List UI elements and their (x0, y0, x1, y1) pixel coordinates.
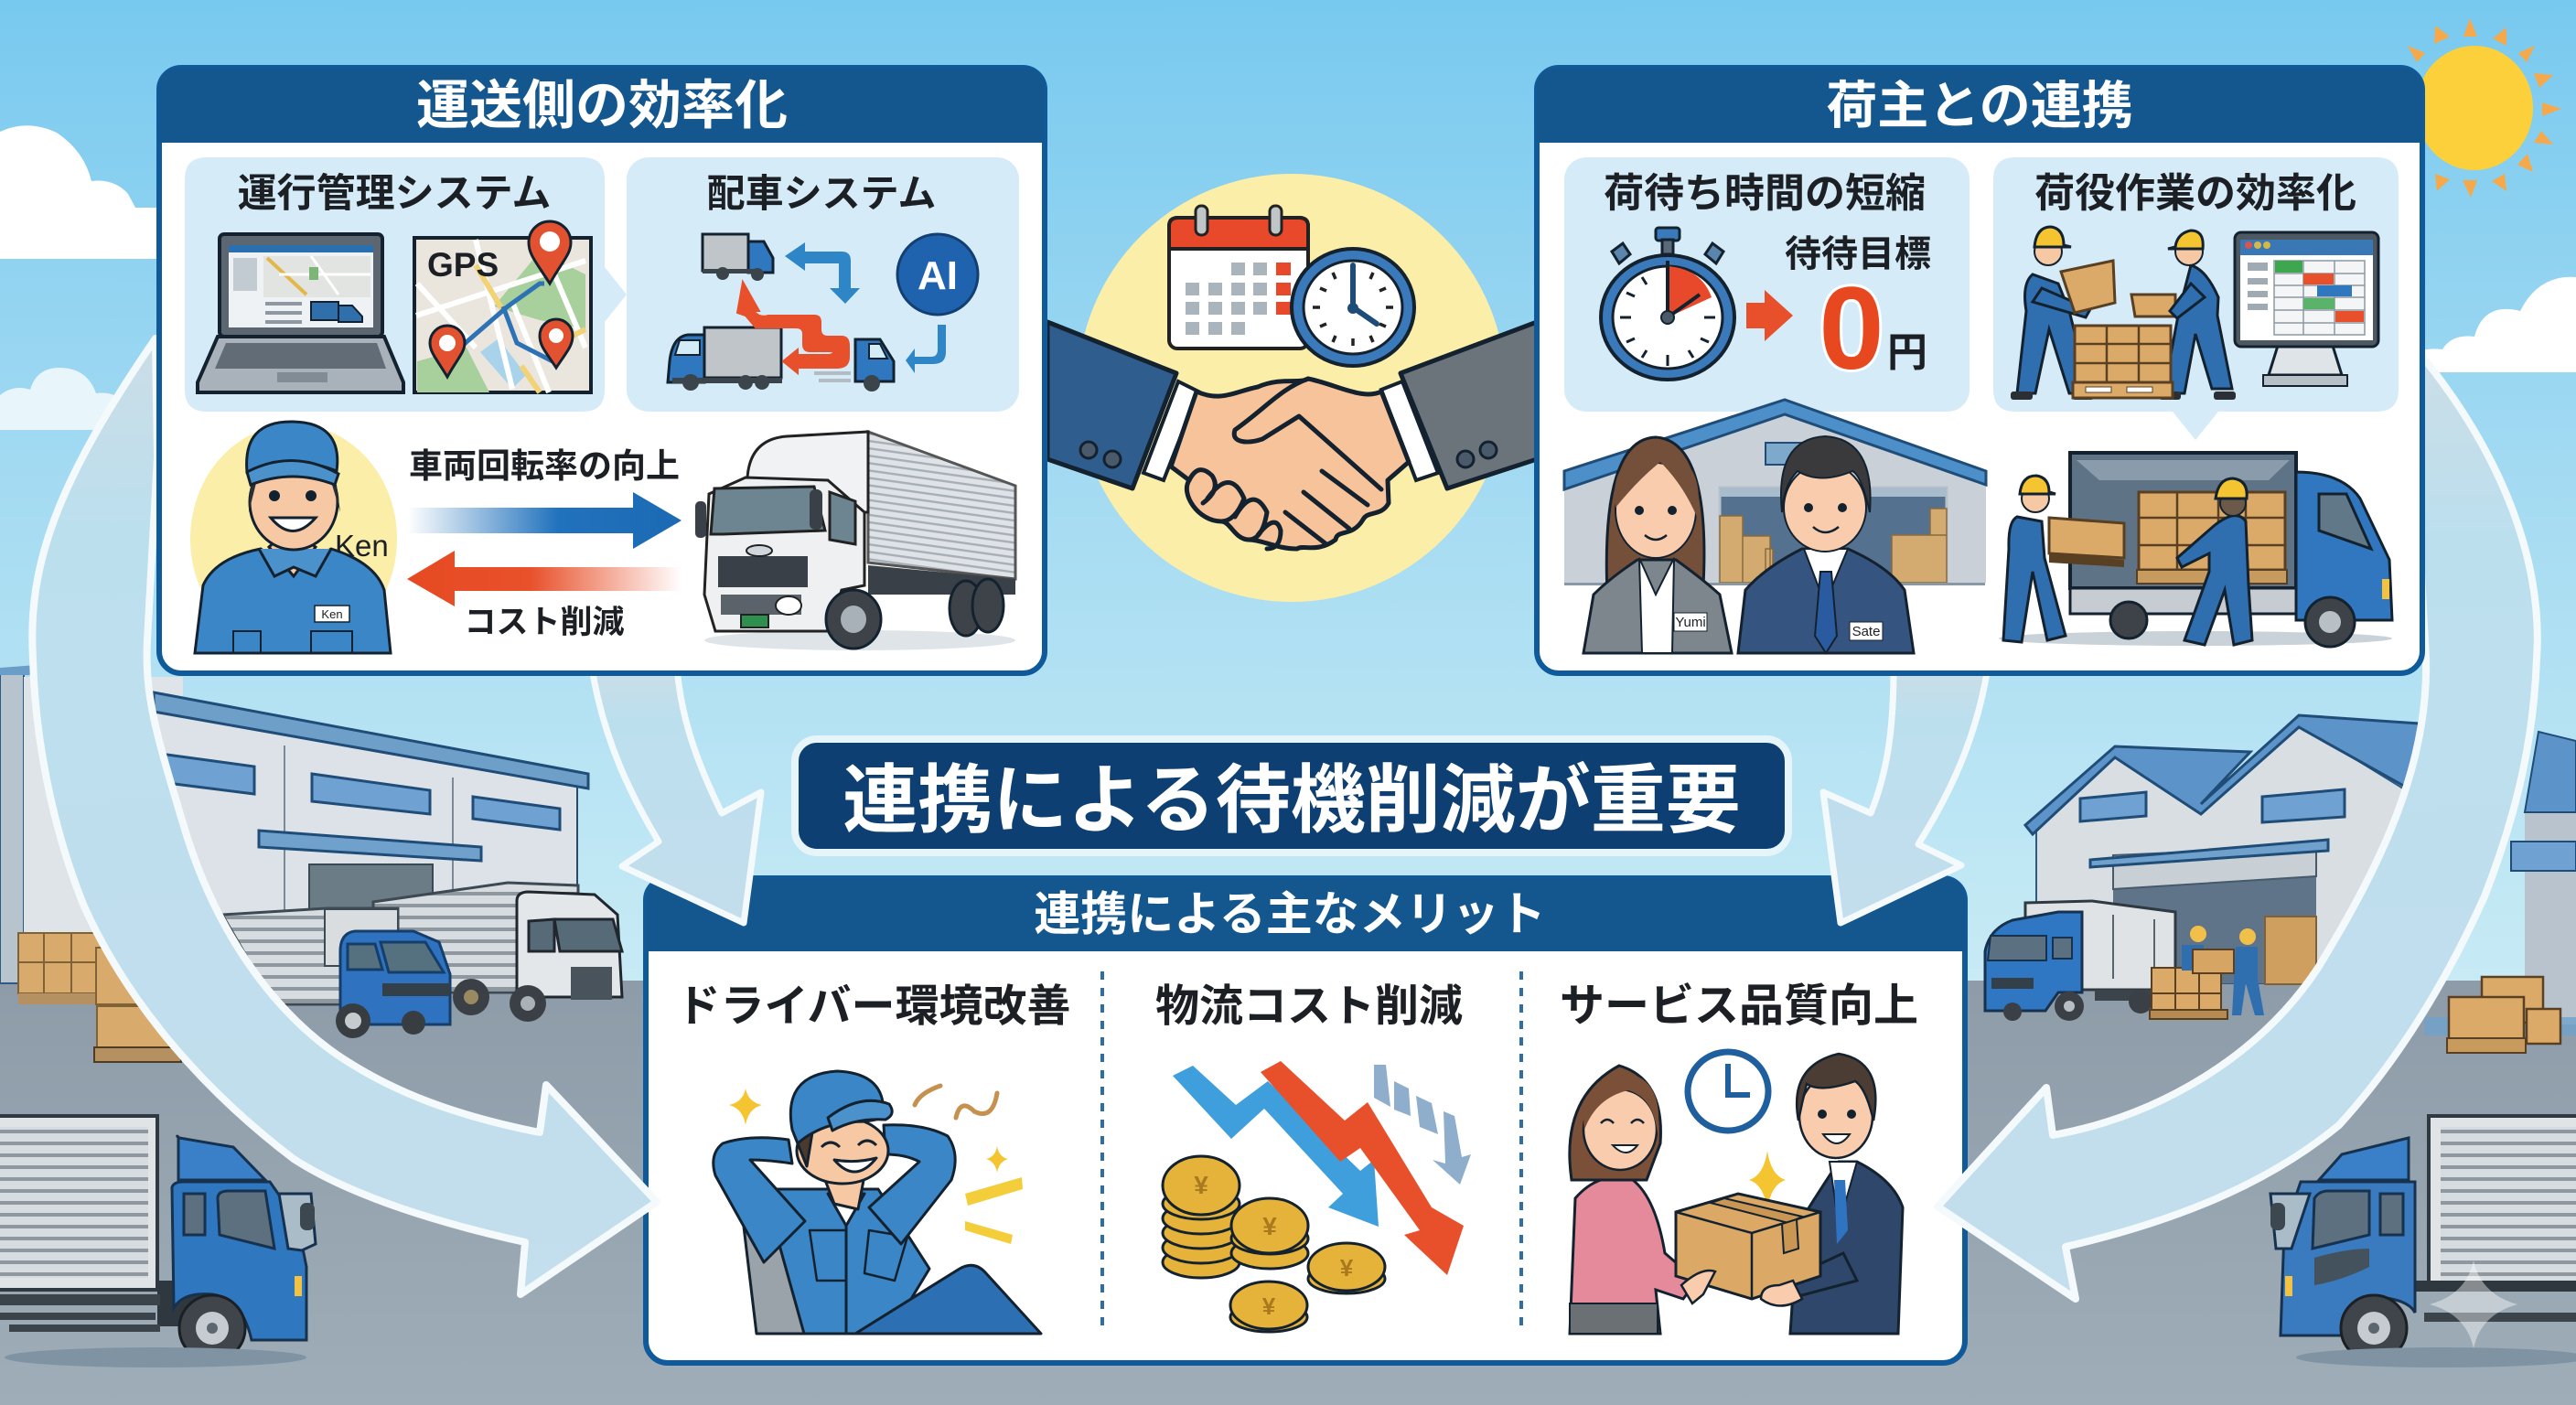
icon: small truck lower right (814, 339, 894, 391)
arrow: red (1746, 290, 1793, 341)
subheading: 荷待ち時間の短縮 (1604, 171, 1926, 216)
character: Sate (1738, 436, 1914, 653)
arrow: blue to truck (407, 492, 682, 549)
truck: large blue bottom left (0, 1116, 316, 1361)
illustration: large truck (695, 432, 1015, 650)
name tag (1850, 622, 1883, 640)
background: workers and pallet at right warehouse (2150, 926, 2264, 1019)
icon: clock (1292, 249, 1414, 366)
icon: calendar (1169, 206, 1308, 349)
arrow: red to driver (407, 551, 682, 606)
arrow: large curved right (1937, 348, 2538, 1299)
panel: 連携による主なメリット (646, 878, 1965, 1363)
illustration: handshake with calendar and clock (1047, 174, 1537, 602)
ground (0, 981, 2576, 1405)
icon: pallet of boxes (2073, 326, 2173, 398)
heading: 荷主との連携 (1826, 77, 2133, 134)
arrow: large curved left (32, 338, 657, 1294)
panel: 運送側の効率化 (159, 68, 1045, 673)
yellow circle (190, 424, 397, 653)
arrow: red routing (737, 282, 849, 373)
icon: sun (2408, 18, 2561, 198)
character: driver Ken (190, 422, 397, 653)
heading: 連携による主なメリット (1034, 888, 1546, 940)
unit: 円: 円 (1887, 330, 1927, 375)
character: driver Ken: Ken (321, 607, 343, 621)
sky background (0, 0, 2576, 988)
sub-panel: 荷役作業の効率化 (1993, 157, 2399, 440)
label: 車両回転率の向上: 車両回転率の向上 (409, 447, 680, 485)
label: ドライバー環境改善: ドライバー環境改善 (676, 982, 1071, 1031)
character: Yumi: Yumi (1675, 615, 1706, 630)
badge (315, 606, 349, 622)
arrow: blue routing (785, 242, 860, 304)
sub-panel: 配車システム (627, 157, 1019, 412)
label: 待待目標: 待待目標 (1785, 234, 1931, 274)
icon: sparkle (1749, 1151, 1786, 1209)
callout: 連携による待機削減が重要 (795, 739, 1788, 853)
icon: watermark sparkle (2430, 1260, 2517, 1348)
sub-panel: 運行管理システム (185, 157, 627, 412)
background: right far warehouse (2424, 732, 2576, 1035)
icon: AI badge (897, 234, 978, 315)
icon: large truck lower (668, 327, 782, 391)
truck: white parked left (373, 883, 622, 1022)
yen sign: ¥ (1262, 1292, 1276, 1320)
background: right stacked boxes (2447, 977, 2560, 1053)
subheading: 荷役作業の効率化 (2034, 171, 2356, 216)
character: worker in truck (2177, 478, 2252, 645)
truck: blue at right warehouse (1985, 901, 2177, 1021)
panel header bar (1537, 68, 2422, 143)
arrow: small right to merit panel (1823, 668, 1988, 923)
subheading: 配車システム (707, 172, 936, 215)
hands (1171, 379, 1409, 549)
character: worker right (2159, 231, 2236, 400)
icon: GPS map (414, 221, 591, 392)
truck: blue parked left (222, 908, 450, 1038)
character: Sate: Sate (1852, 624, 1880, 639)
icon: laptop (198, 234, 403, 392)
icon: sparkles and motion lines (729, 1086, 1023, 1244)
icon: AI badge: AI (918, 253, 958, 298)
subheading: 運行管理システム (238, 172, 551, 216)
arrow: blue from AI (906, 325, 946, 373)
panel body (159, 68, 1045, 673)
yellow circle (1078, 174, 1506, 602)
panel header bar (159, 68, 1045, 143)
icon: stopwatch (1601, 228, 1734, 380)
illustration: loading truck (1999, 453, 2392, 647)
panel body (646, 878, 1965, 1363)
sleeve buttons (1080, 442, 1497, 467)
panel header bar (646, 878, 1965, 951)
yen sign: ¥ (1194, 1171, 1208, 1199)
heading: 運送側の効率化 (416, 76, 788, 135)
shadow: bottom right truck (2296, 1347, 2576, 1367)
label: 物流コスト削減: 物流コスト削減 (1155, 982, 1463, 1031)
truck: large blue bottom right (2270, 1116, 2576, 1361)
number: 0: 0 (1819, 263, 1884, 394)
callout: 連携による待機削減が重要: 連携による待機削減が重要 (843, 759, 1741, 842)
body (195, 549, 391, 653)
icon: box passed (2131, 295, 2175, 316)
hands (1681, 1271, 1802, 1306)
truck cargo boxes (2137, 492, 2287, 584)
character: worker carrying (2003, 476, 2124, 642)
name tag (1674, 613, 1707, 631)
cloud: upper left (0, 125, 165, 259)
background: left stacked boxes (18, 933, 181, 1062)
icon: small truck upper (703, 234, 773, 281)
character: worker left (2011, 227, 2094, 400)
yen sign: ¥ (1340, 1254, 1354, 1282)
icon: box held (2061, 261, 2115, 313)
yen sign: ¥ (1262, 1212, 1277, 1240)
left cuff (1143, 381, 1198, 480)
panel body (1537, 68, 2422, 673)
shadow: bottom left truck (5, 1347, 306, 1367)
character: Yumi (1583, 437, 1732, 653)
cloud: right (2415, 277, 2576, 372)
cap (247, 422, 338, 472)
background: right warehouse (2025, 715, 2433, 984)
label: サービス品質向上: サービス品質向上 (1560, 981, 1918, 1031)
icon: monitor schedule (2235, 232, 2378, 386)
icon: clock (1688, 1052, 1768, 1131)
arrow: small left to merit panel (592, 668, 761, 923)
icon: parcel (1676, 1194, 1820, 1299)
panel: 荷主との連携 (1537, 68, 2422, 673)
character: man (1775, 1054, 1903, 1334)
illustration: relaxed driver (714, 1071, 1041, 1334)
illustration: shipper warehouse (1564, 400, 1986, 585)
left sleeve (1047, 322, 1176, 488)
label: コスト削減: コスト削減 (464, 605, 625, 640)
illustration: box handover (1570, 1052, 1903, 1334)
icon: falling cost arrows (1173, 1061, 1471, 1275)
name tag: Ken: Ken (335, 529, 389, 563)
right cuff (1381, 381, 1438, 480)
cloud: lower left (0, 368, 119, 430)
label: GPS: GPS (427, 246, 499, 284)
icon: yen coins (1163, 1156, 1385, 1332)
sub-panel: 荷待ち時間の短縮 (1564, 157, 1970, 412)
background: left warehouse (0, 665, 588, 983)
character: woman (1570, 1066, 1697, 1334)
dividers (1102, 971, 1521, 1334)
head (250, 455, 338, 550)
fingers and thumb (1189, 379, 1381, 549)
right sleeve (1401, 322, 1537, 488)
